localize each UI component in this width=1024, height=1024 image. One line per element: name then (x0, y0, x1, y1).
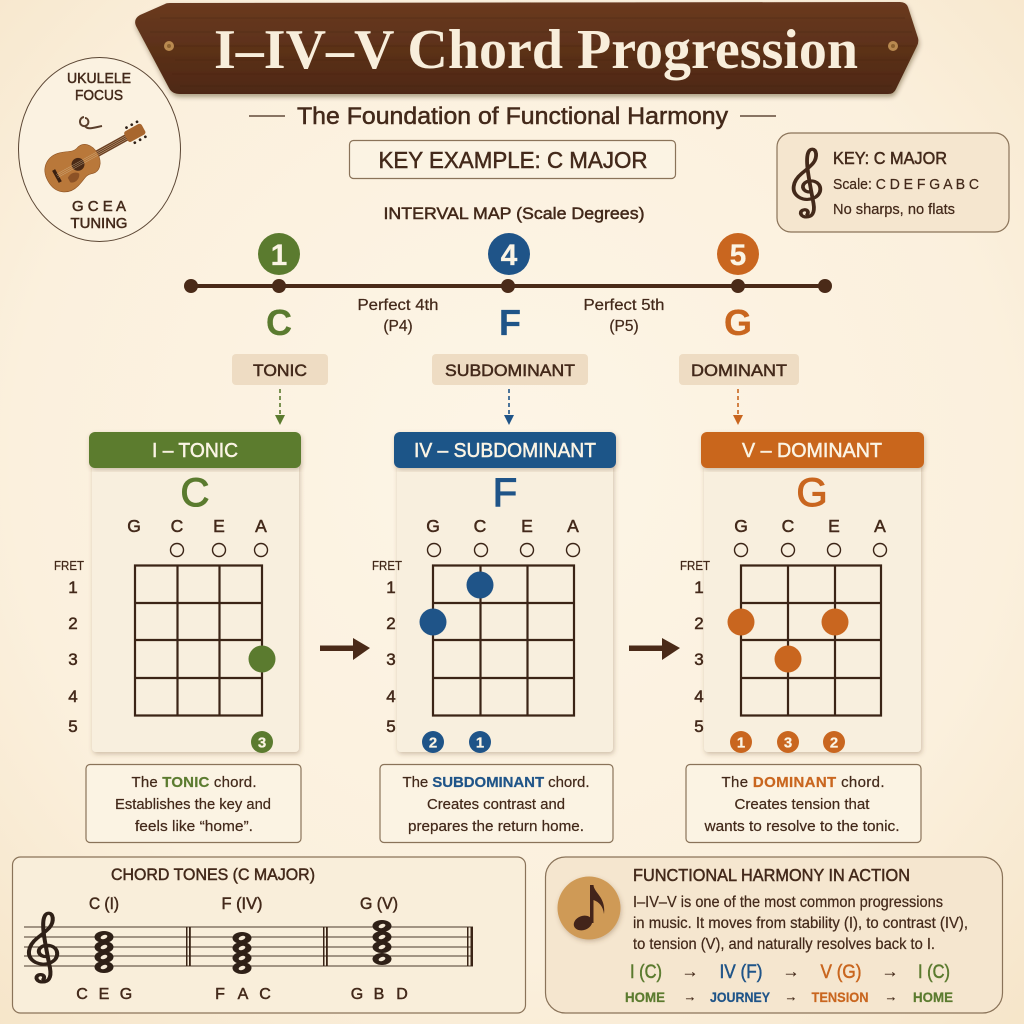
key example label: KEY EXAMPLE: C MAJOR (378, 147, 648, 173)
icon: small squiggle (80, 117, 102, 128)
note letter F: F (499, 302, 521, 343)
text block: tonic description: feels like “home”. (135, 818, 253, 835)
function label: dominant (679, 354, 799, 385)
panel: tonic chord: 4 (68, 687, 78, 706)
fretboard grid (741, 565, 881, 716)
meaning row: → (684, 989, 696, 1004)
text block: dominant description: The DOMINANT chord. (722, 774, 884, 791)
meaning row: → (884, 989, 898, 1004)
key info box: No sharps, no flats (833, 202, 955, 218)
note names: E (99, 986, 109, 1003)
perfect 4th label: (P4) (383, 318, 413, 335)
heading: FUNCTIONAL HARMONY IN ACTION (633, 865, 910, 885)
notes: G chord (372, 920, 392, 965)
icon: ukulele (38, 111, 153, 198)
text block: tonic description: The TONIC chord. (132, 774, 256, 791)
panel: dominant chord: G (734, 516, 748, 536)
panel: tonic chord: E (213, 516, 225, 536)
progression row: IV (F) (720, 962, 762, 983)
ukulele focus badge: FOCUS (75, 87, 123, 104)
perfect 5th label: (P5) (609, 318, 639, 335)
finger dot: C string fret 1 (466, 572, 494, 598)
panel: subdominant chord: IV – SUBDOMINANT (414, 440, 596, 462)
panel: subdominant chord: F (493, 471, 517, 515)
icon: music note medallion (558, 876, 620, 940)
panel: tonic chord: C (181, 471, 209, 515)
arrow: subdominant down (504, 389, 514, 425)
progression row: → (682, 962, 698, 981)
finger number 1 (469, 731, 491, 753)
text block: subdominant description: The SUBDOMINANT chord. (402, 774, 590, 791)
finger number 2: 2 (830, 734, 838, 752)
panel: subdominant chord: 5 (386, 717, 396, 736)
note names: C (259, 986, 271, 1003)
function label: tonic (232, 354, 328, 385)
note names: G (120, 986, 132, 1003)
arrow: dominant down (733, 389, 743, 425)
panel: tonic chord: 1 (68, 578, 78, 597)
perfect 4th label (358, 297, 438, 335)
key info box: Scale: C D E F G A B C (833, 177, 979, 193)
finger dot: C string fret 3 (774, 646, 802, 672)
perfect 5th label: Perfect 5th (584, 297, 664, 314)
arrow: subdominant to dominant (629, 638, 680, 660)
function label: subdominant: SUBDOMINANT (445, 361, 575, 380)
progression row: V (G) (820, 962, 862, 983)
ukulele focus badge: G C E A (72, 198, 126, 215)
text block: tonic description (86, 764, 301, 842)
meaning row: JOURNEY (710, 989, 771, 1005)
panel: dominant chord: 2 (694, 614, 704, 633)
note names: A (238, 986, 249, 1003)
function label: subdominant (432, 354, 588, 385)
finger number 2 (422, 731, 444, 753)
interval map heading: INTERVAL MAP (Scale Degrees) (384, 204, 644, 223)
degree 4 (488, 233, 530, 275)
note letter G: G (724, 302, 752, 343)
text block: subdominant description (380, 764, 613, 842)
heading: CHORD TONES (C MAJOR) (111, 865, 315, 884)
arrow: tonic to subdominant (320, 638, 370, 660)
degree 5: 5 (730, 239, 746, 272)
text block: dominant description (686, 764, 921, 842)
chord labels (89, 894, 398, 913)
finger number 1: 1 (476, 734, 484, 752)
panel: dominant chord: 4 (694, 687, 704, 706)
meaning row: TENSION (812, 989, 868, 1005)
panel: tonic chord: 2 (68, 614, 78, 633)
meaning row: HOME (625, 989, 665, 1005)
chord labels: F (IV) (222, 894, 262, 913)
title banner (135, 2, 918, 94)
panel: subdominant chord: E (521, 516, 533, 536)
panel: subdominant chord: 3 (386, 650, 396, 669)
panel: chord tones (12, 857, 526, 1013)
panel: dominant chord: A (874, 516, 886, 536)
panel: subdominant chord: C (474, 516, 486, 536)
finger number 1: 1 (737, 734, 745, 752)
degree 4: 4 (501, 239, 518, 272)
text block: subdominant description: prepares the return home. (408, 818, 584, 835)
key info box (777, 133, 1009, 232)
text block: dominant description: wants to resolve to the tonic. (703, 818, 900, 835)
progression row: → (782, 962, 800, 981)
panel: dominant chord: C (782, 516, 794, 536)
note names: G (351, 986, 363, 1003)
panel: dominant chord: V – DOMINANT (742, 440, 882, 462)
ukulele focus badge (18, 58, 180, 242)
fretboard grid (433, 565, 574, 716)
description: I–IV–V is one of the most common progressions (633, 894, 943, 911)
degree 5 (717, 233, 759, 275)
perfect 4th label: Perfect 4th (358, 297, 438, 314)
finger dot (248, 646, 276, 672)
function label: tonic: TONIC (253, 361, 307, 380)
panel: tonic chord: FRET (54, 559, 84, 573)
finger dot: G string fret 2 (420, 608, 446, 636)
panel: tonic chord: C (171, 516, 183, 536)
panel: dominant chord: 3 (694, 650, 704, 669)
panel: subdominant chord: FRET (372, 559, 402, 573)
function label: dominant: DOMINANT (691, 361, 787, 380)
key info box: KEY: C MAJOR (833, 148, 947, 168)
panel: tonic chord: G (127, 516, 141, 536)
panel: tonic chord: I – TONIC (152, 440, 238, 462)
finger dot: E string fret 2 (822, 608, 848, 636)
text block: tonic description: Establishes the key and (115, 796, 271, 813)
fretboard grid (135, 565, 262, 716)
finger number 2 (823, 731, 845, 753)
note letter C: C (266, 302, 292, 343)
ukulele focus badge: TUNING (70, 215, 128, 232)
panel: tonic chord: 5 (68, 717, 78, 736)
progression row: I (C) (918, 962, 950, 983)
interval map (184, 233, 832, 343)
panel: subdominant chord: 4 (386, 687, 396, 706)
staff (24, 927, 473, 966)
progression row: I (C) (630, 962, 662, 983)
arrow: tonic down (275, 389, 285, 425)
finger number 1 (730, 731, 752, 753)
finger dot: G string fret 2 (728, 608, 754, 636)
finger number 3: 3 (784, 734, 792, 752)
title text: I–IV–V Chord Progression (214, 19, 858, 81)
panel: tonic chord: A (255, 516, 267, 536)
ukulele focus badge: UKULELE (67, 70, 131, 87)
chord labels: C (I) (89, 894, 119, 913)
panel: dominant chord: G (796, 471, 828, 515)
subtitle: The Foundation of Functional Harmony (297, 103, 728, 130)
panel: dominant chord: FRET (680, 559, 710, 573)
panel: dominant chord (680, 432, 924, 753)
text block: dominant description: Creates tension that (734, 796, 870, 813)
panel: subdominant chord (372, 432, 616, 753)
text block: subdominant description: Creates contrast and (427, 796, 565, 813)
meaning row: HOME (913, 989, 953, 1005)
icon: treble clef (794, 149, 820, 217)
panel: dominant chord: 1 (694, 578, 704, 597)
panel: tonic chord (54, 432, 301, 753)
finger number (251, 731, 273, 753)
panel: dominant chord: 5 (694, 717, 704, 736)
note names: C (76, 986, 88, 1003)
degree 1: 1 (271, 239, 287, 272)
note names: F (215, 986, 225, 1003)
description: to tension (V), and naturally resolves back to I. (633, 936, 935, 953)
perfect 5th label (584, 297, 664, 335)
chord labels: G (V) (360, 894, 398, 913)
degree 1 (258, 233, 300, 275)
note names: D (396, 986, 408, 1003)
key example label (350, 140, 676, 178)
notes: F chord (232, 932, 252, 974)
finger number: 3 (258, 734, 266, 752)
progression row: → (882, 962, 898, 981)
panel: dominant chord: E (828, 516, 840, 536)
note names: B (374, 986, 384, 1003)
panel: subdominant chord: 2 (386, 614, 396, 633)
note names (76, 986, 408, 1003)
panel: subdominant chord: A (567, 516, 579, 536)
meaning row: → (784, 989, 798, 1004)
progression row (630, 962, 950, 983)
description: in music. It moves from stability (I), to contrast (IV), (633, 915, 968, 932)
panel: subdominant chord: G (426, 516, 440, 536)
panel: functional harmony (546, 857, 1002, 1013)
panel: tonic chord: 3 (68, 650, 78, 669)
meaning row (625, 989, 953, 1005)
finger number 3 (777, 731, 799, 753)
finger number 2: 2 (429, 734, 437, 752)
notes: C chord (94, 931, 114, 973)
icon: treble clef (29, 913, 57, 982)
description (633, 894, 968, 953)
panel: subdominant chord: 1 (386, 578, 396, 597)
